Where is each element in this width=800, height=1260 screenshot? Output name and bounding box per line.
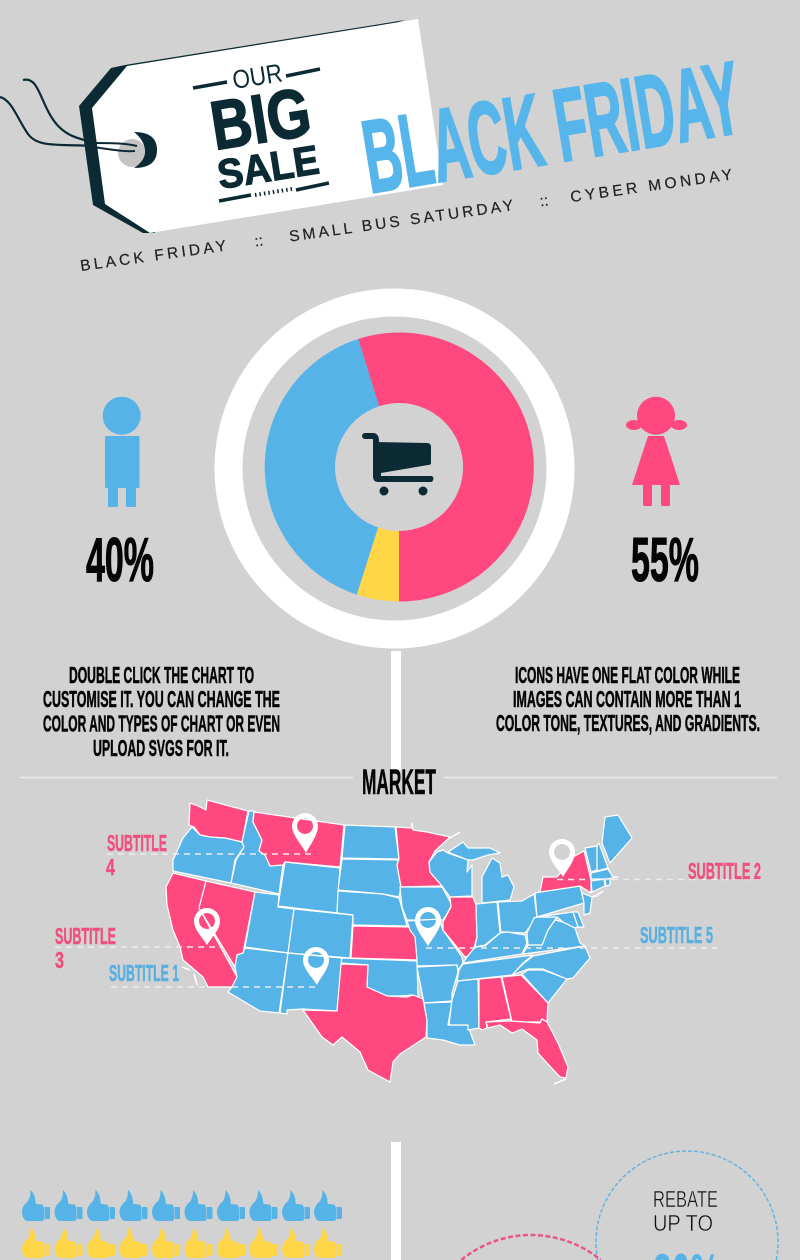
tag hole: [92, 132, 157, 168]
us map: [166, 800, 632, 1084]
yellow segment: [357, 528, 399, 602]
label: subtitle 5: SUBTITLE 5: [640, 922, 713, 948]
subtitle strip: [79, 167, 733, 275]
rebate text: UP TO: [653, 1210, 713, 1236]
rebate text: REBATE: [653, 1186, 718, 1212]
subtitle strip: CYBER MONDAY: [569, 167, 733, 206]
map callouts: dashed leader lines: [55, 854, 761, 987]
subtitle strip: ::: [539, 192, 550, 210]
text block: left: CUSTOMISE IT. YOU CAN CHANGE THE: [43, 686, 280, 712]
tag white body: [92, 19, 443, 233]
text block: left: DOUBLE CLICK THE CHART TO: [69, 662, 254, 688]
tag lettering: our big sale: OUR: [230, 57, 284, 95]
label: subtitle 3: [55, 923, 116, 973]
pictogram: yellow thumbs row: [22, 1227, 342, 1258]
circle: blue dashed rebate: [596, 1151, 778, 1260]
donut chart: [228, 302, 560, 634]
tag lettering: our big sale: [193, 57, 329, 201]
icon: shopping cart: [365, 436, 434, 496]
stat: 40 percent: 40%: [86, 526, 154, 595]
icon: man: [103, 397, 141, 507]
label: subtitle 4: [106, 830, 167, 880]
text block: left: UPLOAD SVGS FOR IT.: [93, 735, 229, 761]
icon: girl: [626, 397, 687, 506]
pink segment: [358, 333, 534, 602]
subtitle strip: BLACK FRIDAY: [79, 238, 227, 275]
market heading: MARKET: [362, 763, 436, 802]
tag dark edge: [79, 20, 405, 233]
text block: left: [43, 662, 280, 761]
map pin: new york: [549, 839, 575, 877]
subtitle strip: ::: [253, 232, 264, 250]
text block: left: COLOR AND TYPES OF CHART OR EVEN: [43, 710, 280, 736]
blue segment: [265, 339, 379, 595]
tag strings: [0, 80, 138, 151]
label: subtitle 3: 3: [55, 947, 64, 973]
center divider bar lower: [391, 1142, 401, 1260]
pictogram: blue thumbs row: [22, 1190, 342, 1221]
header: price tag: [0, 19, 443, 233]
tag lettering: our big sale: SALE: [214, 136, 322, 198]
stat: 55 percent: 55%: [631, 526, 699, 595]
label: subtitle 1: SUBTITLE 1: [109, 960, 179, 986]
circle: pink dashed: [461, 1235, 601, 1260]
subtitle strip: SMALL BUS SATURDAY: [288, 197, 514, 246]
white ring: [228, 302, 560, 634]
map pin: california: [194, 908, 220, 945]
label: subtitle 4: 4: [106, 854, 115, 880]
map pin: new mexico: [303, 947, 329, 985]
rebate text: [653, 1186, 718, 1236]
text block: right: [496, 662, 760, 736]
tag lettering: our big sale: BIG: [205, 73, 316, 165]
map pin: montana: [292, 813, 318, 853]
label: subtitle 4: SUBTITLE: [107, 830, 167, 856]
label: subtitle 3: SUBTITLE: [55, 923, 116, 949]
map pin: missouri: [415, 907, 441, 946]
center divider bar upper: [391, 651, 401, 770]
